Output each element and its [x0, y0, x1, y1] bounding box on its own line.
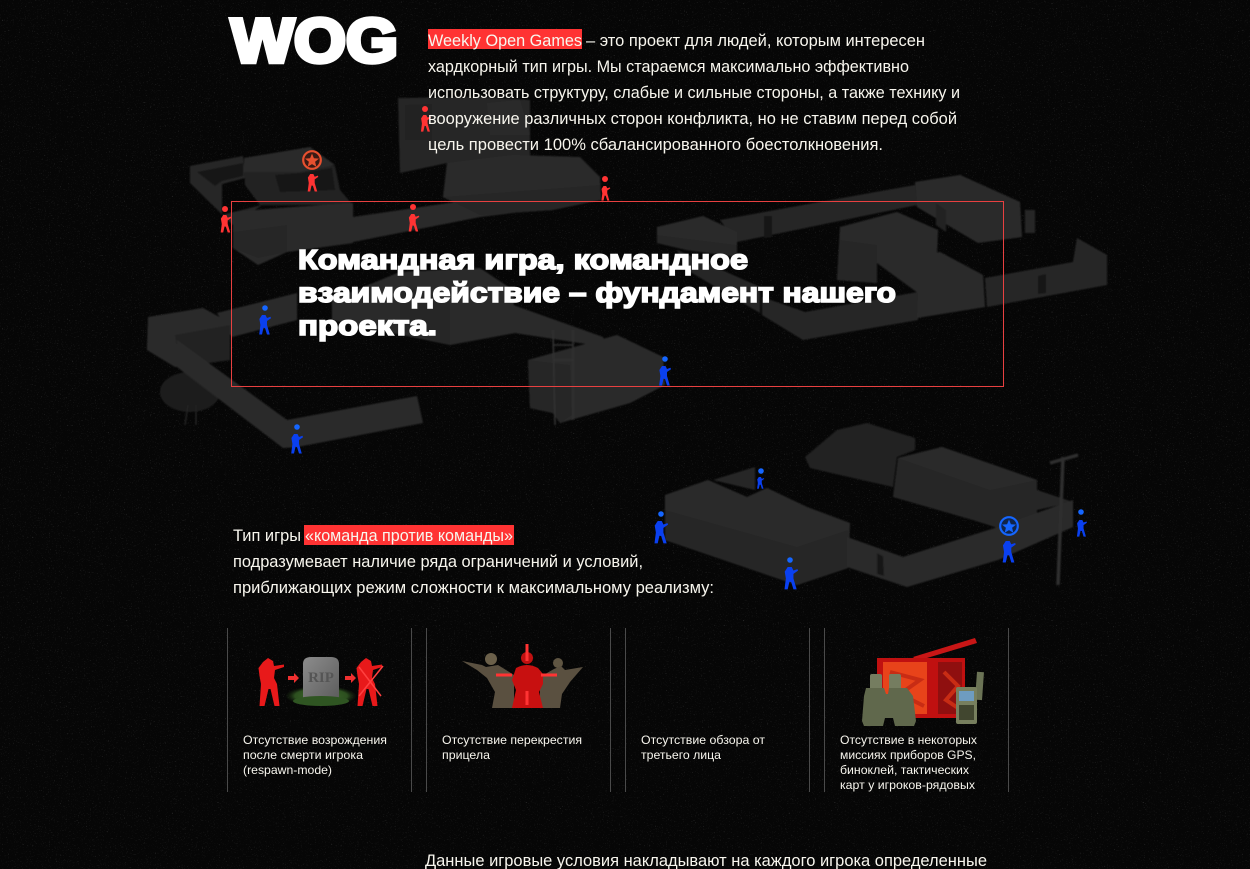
caption: Отсутствие возрождения: [243, 733, 387, 747]
game type text block: приближающих режим сложности к максимальному реализму:: [233, 578, 714, 597]
callout frame with heading: [232, 202, 1004, 386]
caption: [442, 733, 582, 762]
map: top-centre buildings: [398, 97, 601, 215]
icon: soldier, gravestone, crossed soldier: RIP: [308, 670, 334, 686]
card: no respawn: [228, 628, 412, 792]
intro text block: [428, 29, 960, 154]
caption: [243, 733, 387, 777]
map: left compound: [147, 293, 423, 448]
callout frame with heading: проекта.: [298, 310, 437, 341]
map of compounds: [147, 97, 1107, 587]
caption: карт у игроков-рядовых: [840, 778, 975, 792]
map: centre compound: [332, 268, 665, 425]
map: lower-right compound: [665, 423, 1078, 587]
caption: после смерти игрока: [243, 748, 363, 762]
game type text block: «команда против команды»: [305, 526, 513, 545]
icon: soldier, gravestone, crossed soldier: [258, 657, 383, 706]
game type text block: Тип игры: [233, 526, 301, 545]
card: no gear: [824, 628, 1008, 792]
logo: WOG: WOG: [231, 7, 398, 76]
caption: прицела: [442, 748, 490, 762]
intro text block: хардкорный тип игры. Мы стараемся максимально эффективно: [428, 57, 909, 76]
card: no third-person view: [626, 628, 810, 792]
caption: [641, 733, 766, 762]
callout frame with heading: взаимодействие – фундамент нашего: [298, 277, 896, 308]
callout frame with heading: Командная игра, командное: [298, 244, 748, 275]
game type text block: подразумевает наличие ряда ограничений и условий,: [233, 552, 643, 571]
caption: биноклей, тактических: [840, 763, 969, 777]
intro text block: цель провести 100% сбалансированного боестолкновения.: [428, 135, 883, 154]
map: right compound: [657, 175, 1107, 340]
icon: red commander star: [303, 151, 321, 169]
icon: soldiers with crosshair: [462, 644, 583, 708]
map: top-left compound: [190, 147, 520, 265]
intro text block: вооружение различных сторон конфликта, но не ставим перед собой: [428, 109, 957, 128]
caption: миссиях приборов GPS,: [840, 748, 976, 762]
caption: (respawn-mode): [243, 763, 332, 777]
caption: третьего лица: [641, 748, 721, 762]
blue team players: [259, 305, 1087, 589]
intro text block: использовать структуру, слабые и сильные стороны, а также технику и: [428, 83, 960, 102]
caption: Отсутствие перекрестия: [442, 733, 582, 747]
caption: Отсутствие обзора от: [641, 733, 766, 747]
icon: map case, binoculars and GPS: [862, 638, 984, 726]
red team players: [221, 106, 610, 233]
intro text block: Weekly Open Games: [428, 31, 582, 50]
intro text block: – это проект для людей, которым интересен: [586, 31, 925, 50]
game type text block: [233, 525, 714, 597]
card: no crosshair: [426, 628, 610, 792]
caption: [840, 733, 977, 792]
caption: Отсутствие в некоторых: [840, 733, 977, 747]
icon: blue commander star: [1000, 517, 1018, 535]
